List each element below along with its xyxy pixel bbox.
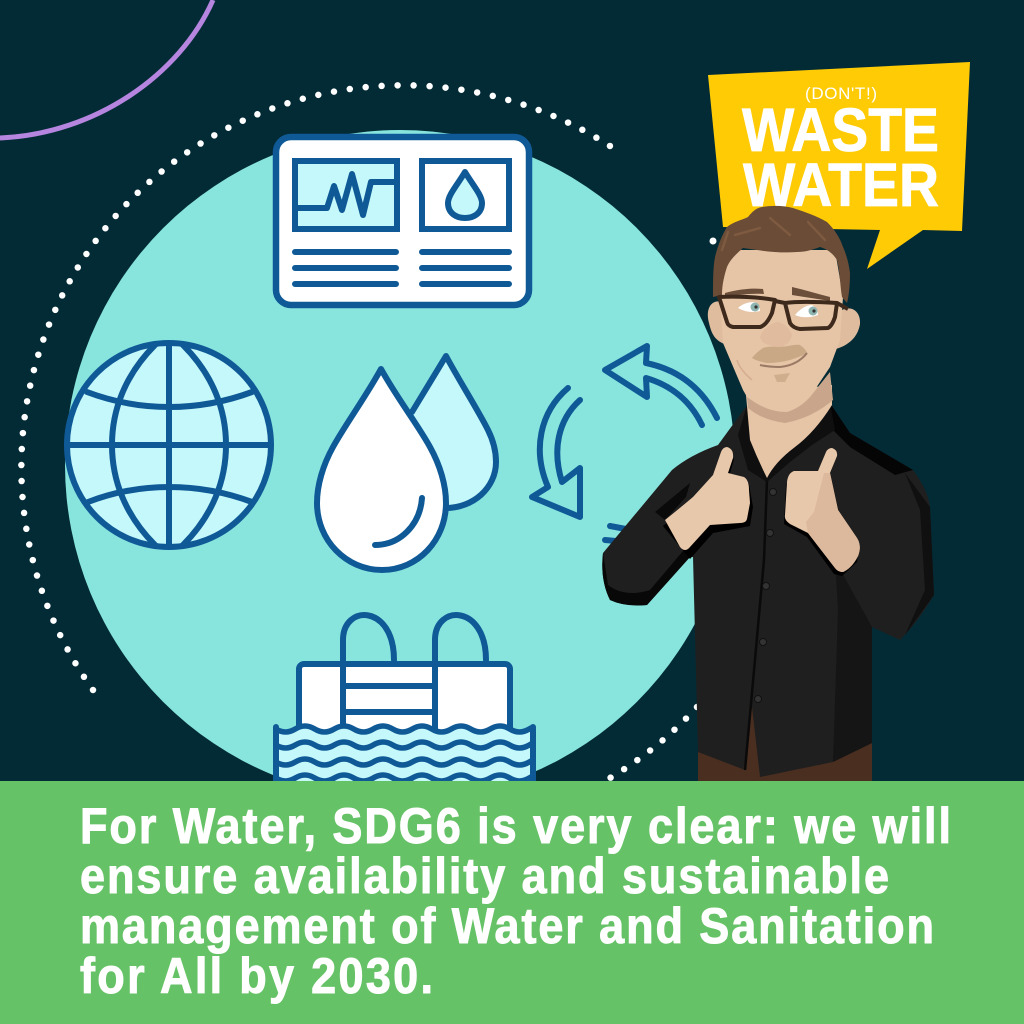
speech bubble: WATER	[743, 151, 939, 219]
green footer band	[0, 781, 1024, 1024]
shirt shadows	[602, 403, 934, 770]
speech bubble	[708, 62, 970, 269]
ears	[708, 301, 860, 350]
collar	[738, 403, 835, 482]
right hand shading	[806, 473, 860, 572]
right hand thumb up	[785, 448, 860, 572]
dotted ring	[21, 85, 697, 778]
eyebrows	[725, 287, 830, 301]
goatee	[774, 373, 790, 382]
neck	[746, 385, 832, 478]
speech bubble: WASTE	[742, 96, 939, 164]
icon: report card	[276, 137, 529, 305]
left hand thumb up	[665, 447, 750, 550]
footer text: For Water, SDG6 is very clear: we will	[80, 799, 951, 855]
arrow: upper recycling arrow	[605, 346, 717, 425]
trousers	[698, 735, 872, 782]
right hand shadow	[784, 452, 859, 576]
footer text: for All by 2030.	[80, 949, 433, 1005]
arrow: lower recycling arrow	[532, 388, 580, 517]
chin shadow	[747, 372, 833, 423]
footer text	[80, 799, 951, 1005]
cheek line	[737, 360, 752, 380]
shirt opening	[743, 707, 760, 777]
hair	[713, 206, 850, 303]
face	[720, 250, 843, 412]
left hand shadow	[663, 451, 753, 559]
hair strands	[722, 218, 825, 250]
teal circle	[65, 130, 735, 800]
arrow: third arrow stub behind sleeve	[605, 526, 626, 541]
icon: swimming pool ladder	[256, 615, 549, 781]
smile	[760, 353, 807, 367]
footer text: management of Water and Sanitation	[80, 899, 934, 955]
footer text: ensure availability and sustainable	[80, 849, 889, 905]
nose	[760, 322, 792, 348]
speech bubble: (DON'T!)	[805, 84, 877, 103]
shirt body and sleeves	[602, 403, 934, 777]
moustache	[752, 345, 807, 363]
dot behind head	[710, 238, 716, 244]
icon: water drops	[317, 356, 496, 570]
icon: globe	[67, 343, 271, 547]
glasses	[719, 297, 848, 329]
purple arc decoration	[0, 0, 213, 138]
buttons	[754, 488, 776, 702]
eyes	[738, 302, 818, 317]
man giving thumbs up	[602, 206, 934, 782]
